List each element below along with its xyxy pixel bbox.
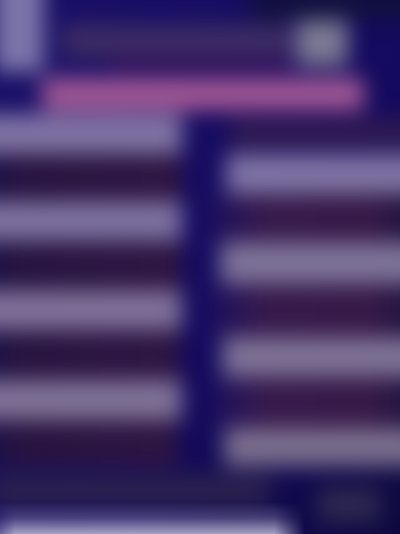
left item 3 heading [0,290,182,330]
right top shade [230,118,400,148]
right item 2 heading [220,242,400,284]
title [62,24,292,58]
right item 3 text [212,374,400,432]
left item 1 heading [0,114,182,154]
header corner shade [250,0,400,20]
icon: header badge [296,20,348,66]
subtitle banner [42,78,364,110]
right item 3 heading [222,337,400,377]
footer bar [0,502,305,534]
left item 1 text [0,150,182,206]
right item 4 heading [224,428,400,466]
footer text band [0,474,270,508]
left item 4 heading [0,380,182,420]
left item 2 text [0,238,182,294]
title underline [110,56,290,70]
left item 3 text [0,326,180,384]
left item 2 heading [0,201,182,241]
footer logo [318,488,380,522]
right item 1 text [210,190,400,246]
panel: left column [0,114,182,466]
header side tab [0,0,44,72]
left item 4 text [0,416,178,466]
right item 2 text [210,280,400,340]
right item 1 heading [226,154,400,194]
panel: right column [210,118,400,466]
